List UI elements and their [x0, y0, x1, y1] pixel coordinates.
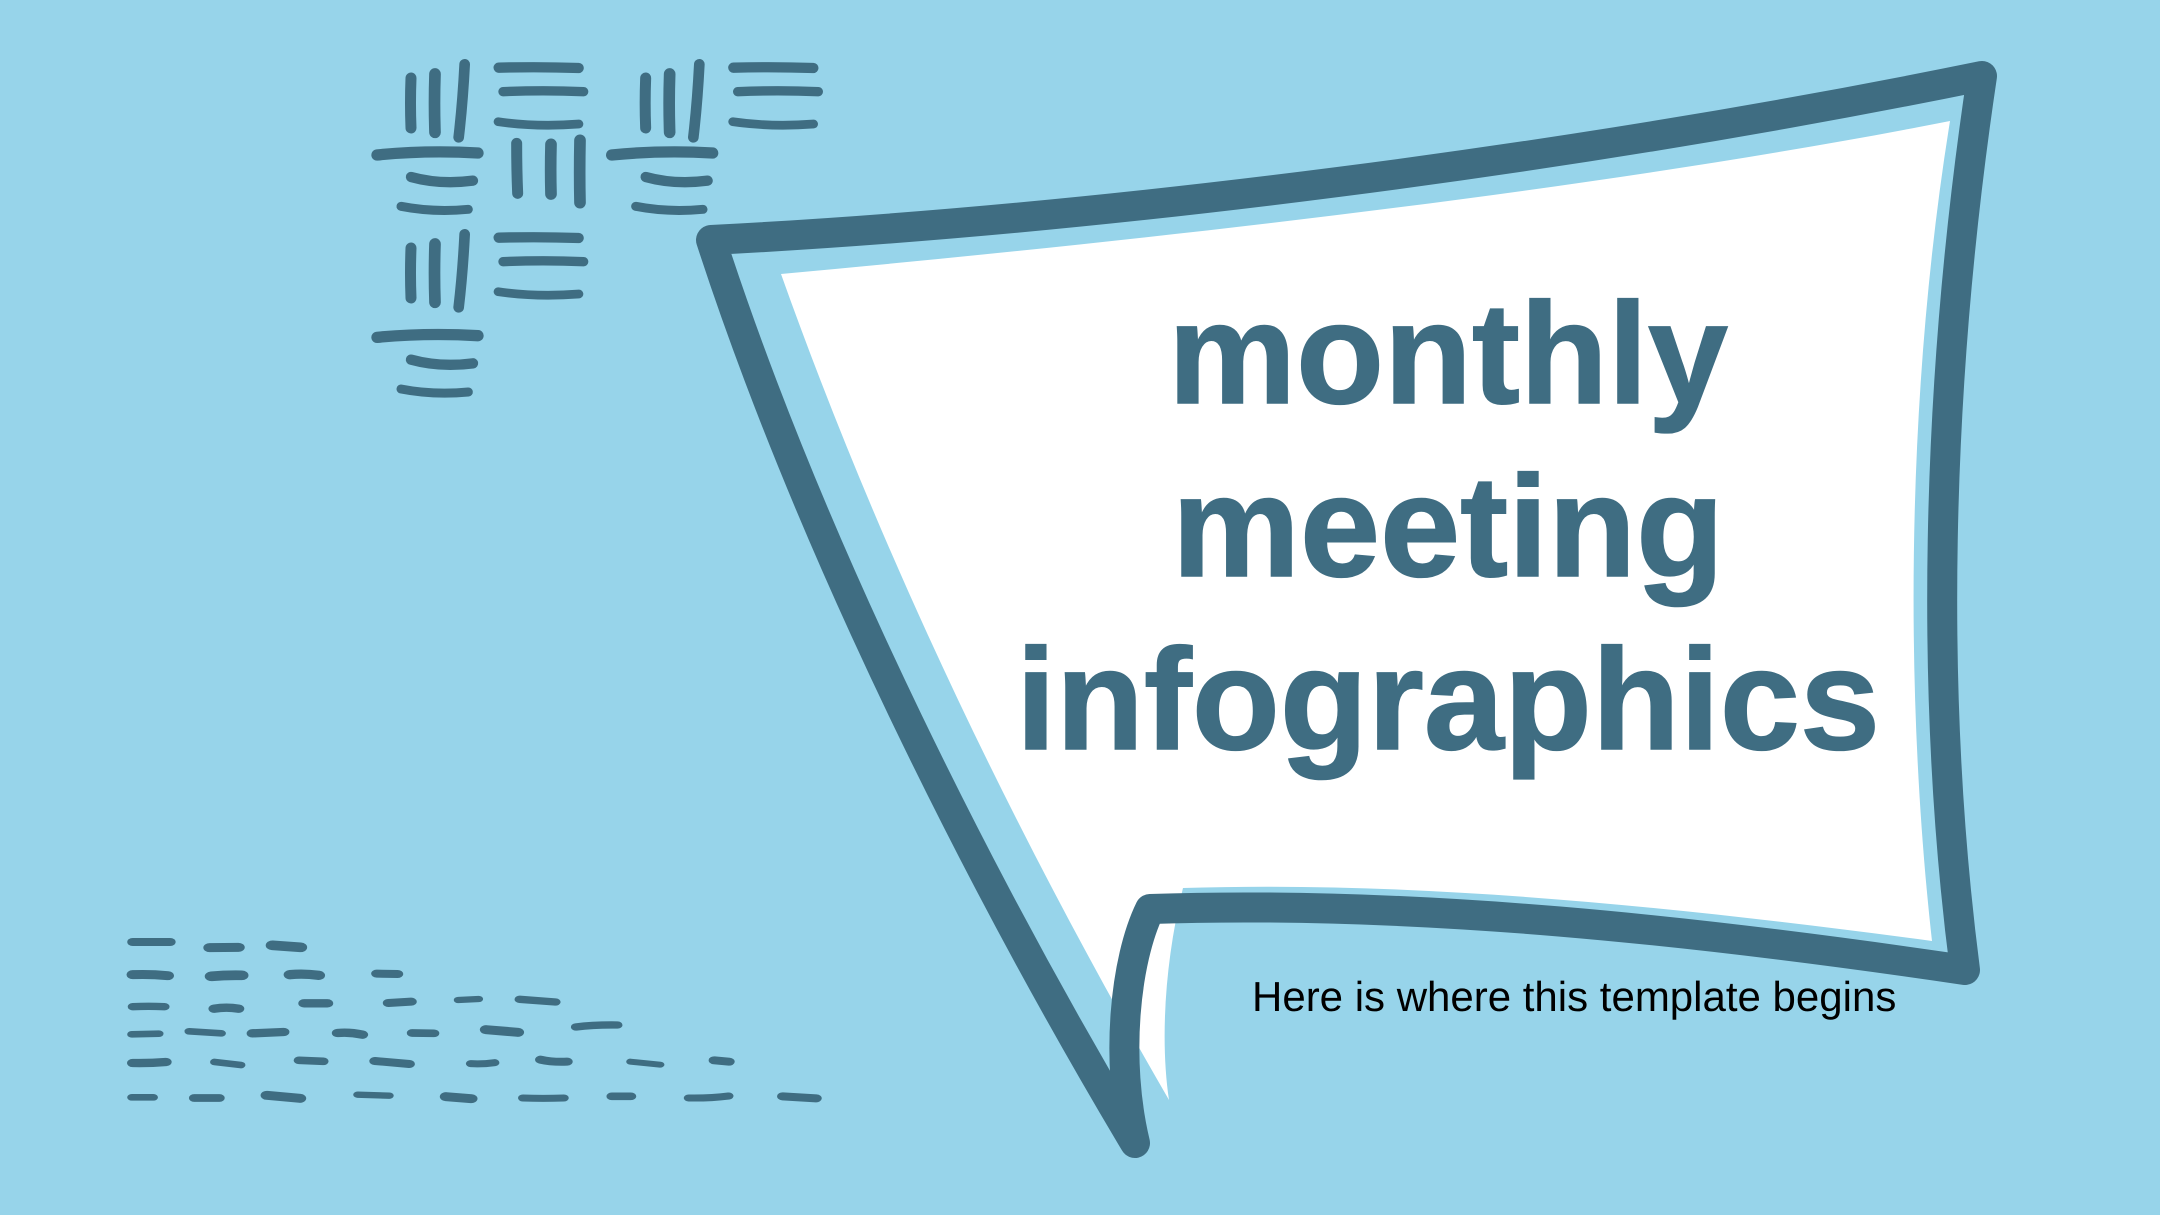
decorative dashed lines — [132, 942, 816, 1099]
subtitle: Here is where this template begins — [1252, 973, 1896, 1020]
bubble dark outline — [711, 76, 1982, 1143]
speech bubble — [711, 76, 1982, 1143]
title line 1: monthly — [1168, 273, 1728, 434]
title — [1016, 273, 1880, 780]
title line 3: infographics — [1016, 619, 1880, 780]
decorative woven line pattern — [377, 64, 818, 393]
title line 2: meeting — [1172, 446, 1724, 607]
bubble white fill — [781, 121, 1950, 1100]
